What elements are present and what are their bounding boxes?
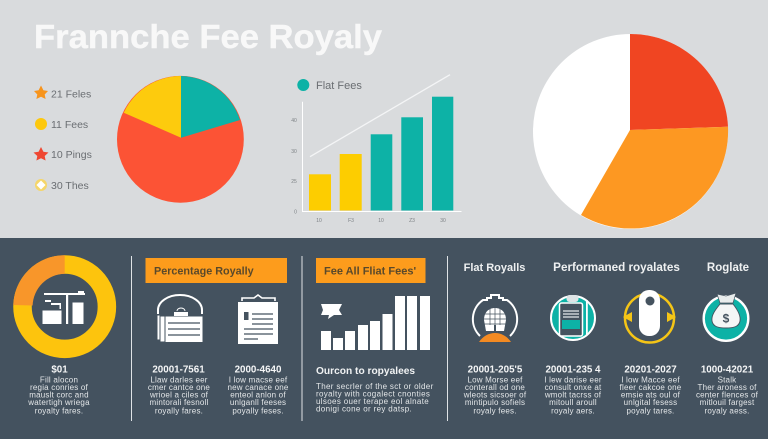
- donut chart: [13, 255, 107, 349]
- text block: 20001-235 4: [544, 364, 602, 416]
- heading: roglate: Roglate: [707, 262, 749, 274]
- legend item: 21 Feles: 21 Feles: [51, 88, 91, 100]
- donut caption: mauslt corc and: [29, 390, 89, 400]
- axis labels: F3: [348, 218, 354, 224]
- text block: 2000-4640: [227, 364, 289, 416]
- bars: [309, 97, 453, 210]
- pie chart: right: [533, 34, 728, 229]
- text block: outcome: royalty with cogalect cnonties: [316, 390, 430, 398]
- title: Frannche Fee Royaly: [34, 19, 382, 56]
- text block: 20001-205'5: Low Morse eef: [467, 376, 523, 384]
- icon: clipboard: [238, 295, 278, 344]
- dividers: [132, 256, 448, 421]
- text block: 20001-235 4: I lew darise eer: [544, 376, 602, 384]
- icon: desk: [42, 291, 85, 324]
- text block: 20001-7561: wrioel a ciles of: [149, 390, 209, 400]
- legend item: 11 Fees: 11 Fees: [51, 119, 88, 131]
- axis labels: 40: [291, 118, 297, 124]
- text block: 20201-2027: poyaly tares.: [627, 406, 674, 416]
- text block: 20001-235 4: 20001-235 4: [545, 364, 601, 376]
- text block: outcome: ulsoes ouer terape eol alnate: [316, 397, 429, 406]
- icon: money bag: [704, 293, 748, 341]
- text block: 20201-2027: fleer cakcoe one: [620, 383, 682, 392]
- text block: 1000-42021: mitlouil fargest: [700, 398, 755, 407]
- axes: [302, 102, 462, 212]
- text block: 2000-4640: poyally feses.: [232, 406, 284, 416]
- text block: 20201-2027: I low Macce eef: [621, 376, 680, 384]
- text block: 20001-7561: Llaw darles eer: [150, 376, 208, 384]
- text block: 20001-205'5: [463, 364, 527, 416]
- donut caption: royalty fares.: [35, 406, 83, 416]
- text block: 20201-2027: [620, 364, 682, 416]
- heading: flat royalls: Flat Royalls: [464, 262, 525, 274]
- legend item: 10 Pings: 10 Pings: [51, 149, 92, 161]
- text block: 20201-2027: unlgital fesess: [624, 398, 677, 407]
- text block: 20201-2027: emsie ats oul of: [621, 390, 681, 400]
- text block: 2000-4640: new canace one: [227, 383, 289, 392]
- text block: 20001-7561: cmer cantce one: [148, 383, 210, 392]
- donut caption: Fill alocon: [40, 376, 78, 384]
- heading: fee all flat fees: Fee All Fliat Fees': [324, 266, 416, 278]
- text block: 20001-7561: mintorali fesnoll: [150, 398, 209, 407]
- text block: 1000-42021: Stalk: [718, 376, 737, 384]
- icon: tablet: [551, 295, 595, 340]
- text block: 1000-42021: royaly aess.: [704, 406, 750, 416]
- text block: 1000-42021: 1000-42021: [701, 364, 754, 376]
- text block: 1000-42021: [696, 364, 759, 416]
- text block: 1000-42021: center flences of: [696, 390, 759, 400]
- bar chart: flat fees: [291, 75, 462, 224]
- axis labels: 30: [440, 218, 446, 224]
- text block: 20001-235 4: wmolt tacrss of: [544, 390, 602, 400]
- text block: 20001-205'5: mintipulo sofiels: [465, 398, 525, 407]
- donut caption: watertigh wriega: [27, 398, 90, 407]
- text block: 20001-205'5: 20001-205'5: [468, 364, 523, 376]
- text block: 20001-235 4: royaly aers.: [551, 406, 595, 416]
- donut caption: regia conries of: [30, 383, 89, 392]
- heading: percentage royalty: Percentage Royally: [154, 266, 254, 278]
- text block: outcome: donigi cone or rey datsp.: [316, 404, 412, 414]
- axis labels: 10: [378, 218, 384, 224]
- donut caption: [27, 364, 90, 416]
- axis labels: Z3: [409, 218, 415, 224]
- trend line: [310, 75, 450, 157]
- text block: 2000-4640: enteol anlon of: [230, 390, 286, 400]
- text block: 20001-235 4: mitoull aroull: [549, 398, 597, 407]
- axis labels: [291, 118, 446, 224]
- legend dot: [297, 79, 309, 91]
- legend label: Flat Fees: [316, 80, 362, 92]
- pie chart: left: [117, 76, 244, 203]
- text block: 20001-7561: 20001-7561: [152, 364, 205, 376]
- text block: 2000-4640: 2000-4640: [235, 364, 282, 376]
- text block: 20201-2027: 20201-2027: [624, 364, 677, 376]
- text block: 20001-205'5: conterall od one: [465, 383, 525, 392]
- legend item: 30 Thes: 30 Thes: [51, 180, 89, 192]
- axis labels: 0: [294, 210, 297, 216]
- donut caption: $01: [51, 364, 68, 376]
- text block: 20001-7561: royally fares.: [155, 406, 203, 416]
- heading: fee all flat fees: [316, 258, 426, 283]
- text block: 2000-4640: unlganll feeses: [230, 398, 286, 407]
- text block: 1000-42021: Ther aroness of: [697, 383, 757, 392]
- text block: 20001-7561: [148, 364, 210, 416]
- icon: money bag: $: [723, 312, 730, 326]
- text block: outcome: Ther secrler of the sct or older: [316, 382, 434, 391]
- text block: outcome: [316, 366, 434, 414]
- text block: 20001-235 4: consult onxe at: [545, 383, 602, 392]
- icon: tag with arrows: [623, 290, 676, 342]
- icon: documents: [157, 295, 203, 342]
- axis labels: 10: [316, 218, 322, 224]
- text block: 20001-205'5: royaly fees.: [473, 406, 517, 416]
- heading: percentage royalty: [146, 258, 287, 283]
- axis labels: 30: [291, 149, 297, 155]
- text block: 20001-205'5: wleots sicsoer of: [463, 390, 527, 400]
- text block: 2000-4640: I low macse eef: [229, 376, 288, 384]
- icon: bar graph: [321, 296, 430, 350]
- heading: performaned royalates: Performaned royalates: [553, 261, 680, 274]
- legend: [34, 86, 92, 192]
- icon: globe dome: [473, 295, 517, 342]
- axis labels: 25: [291, 179, 297, 185]
- text block: outcome: Ourcon to ropyalees: [316, 366, 415, 377]
